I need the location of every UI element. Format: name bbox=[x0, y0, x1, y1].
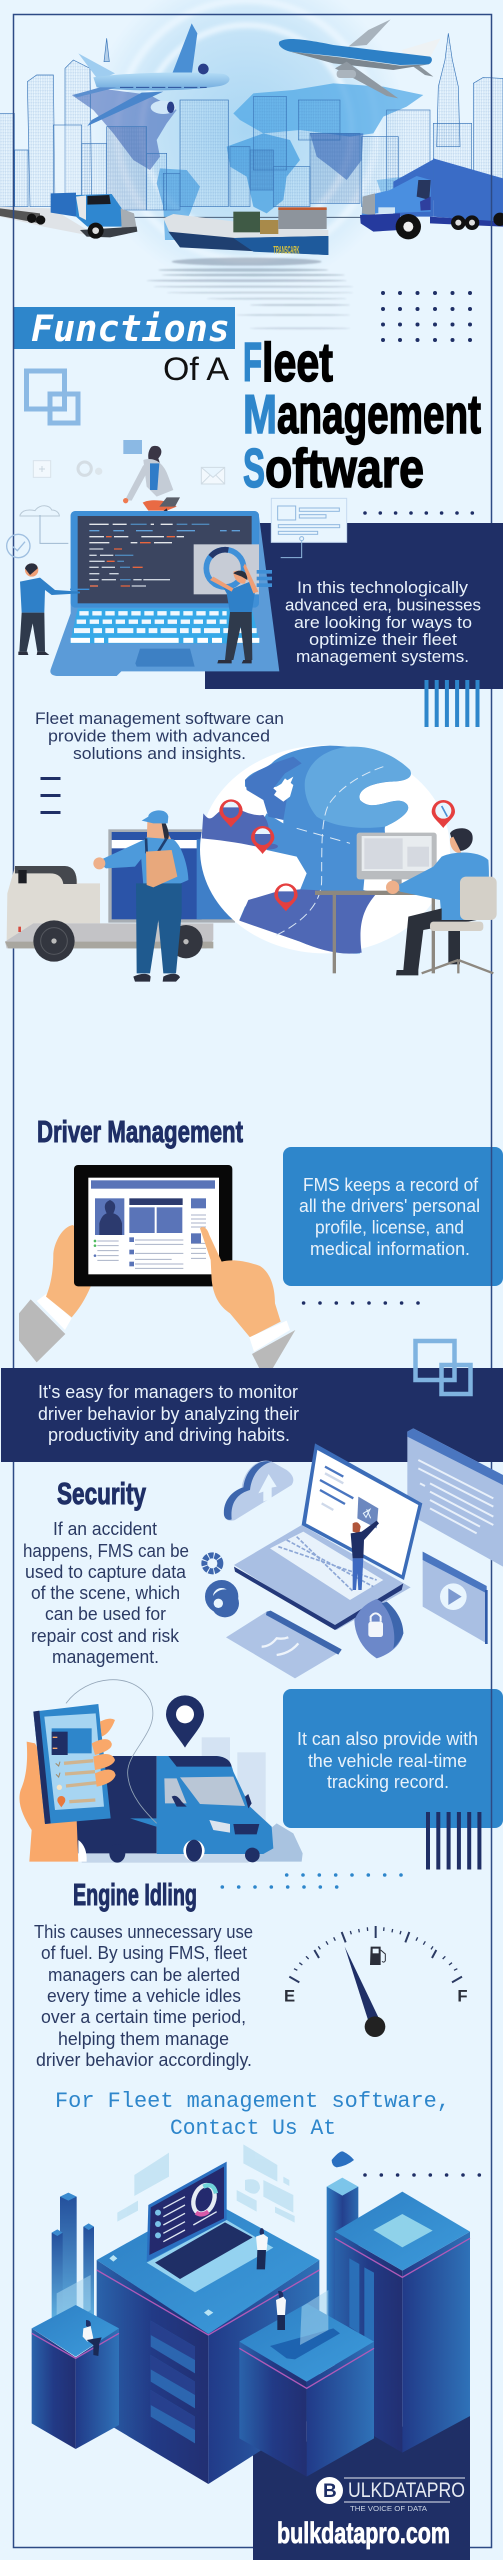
security paragraph bbox=[23, 1519, 189, 1667]
dot row: intro bbox=[363, 511, 474, 515]
tracking text: tracking record. bbox=[327, 1772, 449, 1792]
gears bbox=[204, 1555, 239, 1617]
isometric data center illustration bbox=[32, 2144, 470, 2484]
stripe icon on laptop bbox=[257, 570, 272, 587]
title banner: Functions: Functions bbox=[31, 309, 230, 350]
gauge major ticks bbox=[289, 1926, 462, 1982]
world map bbox=[72, 83, 423, 240]
intro paragraph: are looking for ways to bbox=[294, 614, 472, 632]
E label: E bbox=[284, 1987, 295, 2006]
solutions paragraph: provide them with advanced bbox=[48, 728, 270, 746]
intro paragraph: advanced era, businesses bbox=[285, 596, 481, 614]
driver records text: profile, license, and bbox=[315, 1218, 464, 1238]
right hand and sleeve bbox=[200, 1227, 295, 1368]
title: Fleet: leet bbox=[262, 331, 333, 393]
title: Software: oftware bbox=[265, 437, 424, 499]
laptop bbox=[234, 1443, 422, 1630]
callout: driver records background bbox=[283, 1147, 503, 1286]
plane right bbox=[279, 19, 441, 98]
code lines bbox=[89, 524, 240, 586]
decorative squares near title bbox=[26, 371, 78, 423]
heading: Engine Idling: Engine Idling bbox=[73, 1877, 197, 1912]
engine idling paragraph: driver behavior accordingly. bbox=[36, 2050, 252, 2070]
intro paragraph: management systems. bbox=[296, 648, 469, 666]
hand with phone bbox=[19, 1704, 116, 1862]
security paragraph: happens, FMS can be bbox=[23, 1541, 189, 1561]
logo: BulkDataPro: THE VOICE OF DATA bbox=[350, 2506, 427, 2513]
laptop bbox=[50, 511, 279, 676]
main block bbox=[97, 2198, 319, 2484]
tracking text: the vehicle real-time bbox=[308, 1751, 467, 1771]
hero illustration: transport and city bbox=[0, 0, 503, 329]
left towers bbox=[52, 2193, 94, 2330]
right block bbox=[335, 2192, 470, 2453]
isometric security illustration bbox=[204, 1428, 503, 1678]
delivery scene bbox=[5, 745, 497, 982]
truck left bbox=[0, 193, 137, 239]
cargo ship: TRANSCARK bbox=[273, 244, 299, 256]
location pin bbox=[166, 1695, 204, 1748]
person placing code block bbox=[351, 1497, 379, 1590]
security paragraph: can be used for bbox=[45, 1604, 166, 1624]
engine idling paragraph: This causes unnecessary use bbox=[34, 1922, 253, 1942]
dot grid near title bbox=[381, 291, 472, 342]
laptop on main block bbox=[147, 2162, 273, 2292]
intro paragraph: optimize their fleet bbox=[309, 631, 457, 649]
gauge hub bbox=[365, 2016, 385, 2037]
delivery truck bbox=[5, 829, 235, 962]
small interface icons bbox=[7, 440, 225, 558]
van bbox=[75, 1739, 273, 1863]
shield bbox=[354, 1599, 403, 1658]
tracking text: It can also provide with bbox=[297, 1729, 478, 1749]
contact call to action: For Fleet management software, bbox=[55, 2089, 450, 2114]
gauge minor ticks bbox=[294, 1927, 457, 1970]
security paragraph: repair cost and risk bbox=[31, 1626, 180, 1646]
radial halo rings bbox=[87, 0, 407, 290]
title: Fleet bbox=[243, 331, 333, 393]
F label: F bbox=[457, 1987, 468, 2006]
logo: BulkDataPro: B bbox=[323, 2481, 337, 2502]
small people bbox=[83, 2228, 286, 2356]
engine idling paragraph bbox=[34, 1922, 253, 2070]
title: Fleet: F bbox=[243, 331, 262, 393]
monitoring text bbox=[38, 1382, 299, 1445]
intro stripes bbox=[424, 680, 480, 727]
navy footer block bbox=[253, 2416, 470, 2560]
map pins bbox=[219, 799, 455, 911]
intro paragraph: In this technologically bbox=[297, 579, 469, 597]
floating translucent panels bbox=[117, 2144, 295, 2223]
left small block bbox=[32, 2305, 119, 2449]
plane left bbox=[73, 23, 230, 126]
middle block bbox=[239, 2290, 374, 2477]
right tall tower bbox=[327, 2178, 358, 2327]
fuel pump icon bbox=[370, 1947, 385, 1965]
city skyline sketch bbox=[0, 33, 503, 217]
left hand and sleeve bbox=[19, 1225, 91, 1362]
heading: Security: Security bbox=[57, 1476, 147, 1511]
contact call to action bbox=[55, 2089, 450, 2141]
panel: monitoring navy band bbox=[1, 1368, 503, 1462]
background buildings bbox=[82, 1737, 303, 1863]
monitoring text: It's easy for managers to monitor bbox=[38, 1382, 298, 1402]
shield badge bbox=[332, 2151, 354, 2167]
dot row: driver records bbox=[302, 1301, 420, 1305]
three dashes bbox=[40, 777, 60, 814]
dot row: contact bbox=[363, 2173, 481, 2177]
laptop team illustration bbox=[7, 440, 347, 676]
engine idling paragraph: every time a vehicle idles bbox=[47, 1986, 241, 2006]
monitoring text: driver behavior by analyzing their bbox=[38, 1404, 299, 1424]
dot rows near Engine Idling bbox=[220, 1873, 403, 1889]
cloud bbox=[224, 1461, 293, 1521]
solutions paragraph: Fleet management software can bbox=[35, 710, 284, 728]
engine idling paragraph: helping them manage bbox=[58, 2029, 229, 2049]
gauge needle bbox=[345, 1947, 380, 2024]
chart panel bbox=[194, 544, 259, 594]
delivery worker bbox=[93, 810, 188, 982]
route line bbox=[66, 1680, 157, 1823]
keyboard keys bbox=[71, 613, 259, 640]
van tracking illustration bbox=[19, 1680, 303, 1863]
decorative squares over band bbox=[416, 1341, 470, 1394]
upper dot row bbox=[285, 1873, 403, 1877]
solutions paragraph bbox=[35, 710, 284, 763]
contact call to action: Contact Us At bbox=[170, 2116, 336, 2141]
man pointing at screen bbox=[18, 563, 89, 655]
solutions paragraph: solutions and insights. bbox=[73, 745, 246, 763]
security paragraph: management. bbox=[52, 1647, 159, 1667]
code card bbox=[226, 1611, 342, 1678]
globe bbox=[200, 745, 450, 954]
fuel gauge bbox=[284, 1926, 468, 2037]
tracking text bbox=[297, 1729, 478, 1792]
panel: intro navy block bbox=[205, 523, 503, 689]
title: Software: S bbox=[243, 437, 265, 499]
callout: tracking background bbox=[283, 1689, 503, 1828]
security paragraph: of the scene, which bbox=[31, 1583, 180, 1603]
logo: BulkDataPro bbox=[316, 2477, 465, 2513]
code window bbox=[407, 1428, 503, 1567]
title bbox=[14, 307, 481, 499]
security paragraph: If an accident bbox=[53, 1519, 157, 1539]
lower dot row bbox=[220, 1885, 339, 1889]
truck right bbox=[360, 158, 503, 239]
title: Of A: Of A bbox=[163, 351, 230, 387]
intro paragraph bbox=[285, 579, 481, 666]
seated woman bbox=[123, 446, 180, 523]
tablet bbox=[74, 1165, 232, 1286]
video window bbox=[423, 1552, 488, 1644]
info card bbox=[271, 498, 347, 558]
tablet in hands bbox=[19, 1165, 295, 1368]
driver records text: all the drivers' personal bbox=[299, 1196, 480, 1216]
desk worker bbox=[315, 828, 497, 975]
security paragraph: used to capture data bbox=[25, 1562, 187, 1582]
logo: BulkDataPro: ULKDATAPRO bbox=[348, 2479, 465, 2502]
engine idling paragraph: of fuel. By using FMS, fleet bbox=[41, 1943, 247, 1963]
driver records text bbox=[299, 1175, 480, 1259]
engine idling paragraph: over a certain time period, bbox=[41, 2007, 246, 2027]
engine idling paragraph: managers can be alerted bbox=[48, 1965, 240, 1985]
driver records text: FMS keeps a record of bbox=[303, 1175, 479, 1195]
heading: Driver Management: Driver Management bbox=[37, 1114, 243, 1149]
water reflection bbox=[147, 258, 353, 329]
cargo ship bbox=[163, 207, 328, 256]
driver records text: medical information. bbox=[310, 1239, 470, 1259]
man lifting ring bbox=[210, 563, 258, 663]
title: Management: M bbox=[243, 383, 277, 445]
monitoring text: productivity and driving habits. bbox=[48, 1425, 290, 1445]
tracking stripes bbox=[426, 1812, 481, 1870]
